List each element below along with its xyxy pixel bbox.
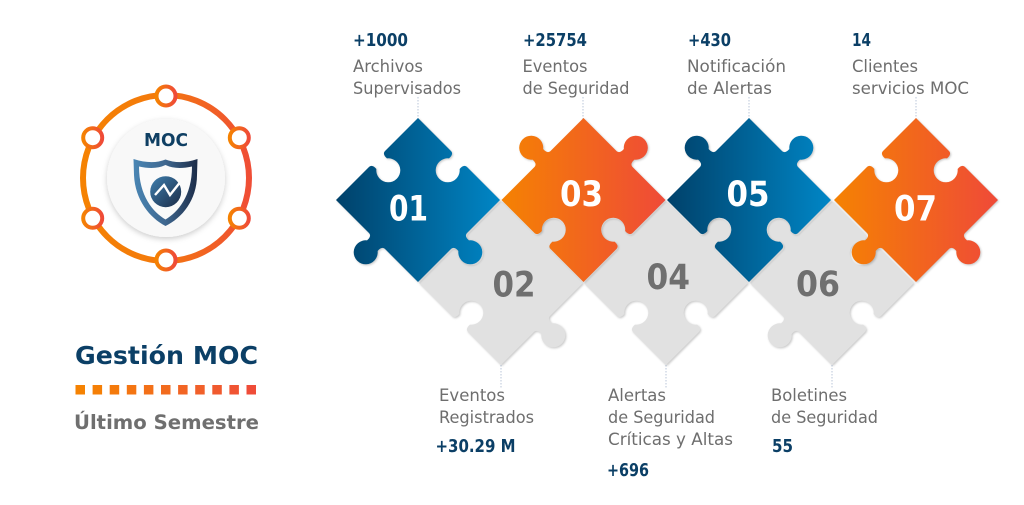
dotted orange divider: [76, 385, 256, 394]
puzzle piece 01: [336, 118, 500, 282]
text block: Eventos Registrados: [436, 386, 534, 457]
heading: Gestión MOC: Gestión MOC: [75, 341, 258, 370]
text block: Alertas de Seguridad Críticas y Altas: Críticas y Altas: [608, 430, 733, 449]
text block: Archivos Supervisados: Supervisados: [353, 79, 461, 98]
puzzle numbers: 02: [492, 266, 536, 306]
puzzle numbers: 07: [894, 190, 937, 230]
puzzle piece 06: [750, 201, 914, 365]
text block: Archivos Supervisados: Archivos: [353, 57, 423, 76]
text block: Alertas de Seguridad Críticas y Altas: de Seguridad: [608, 408, 715, 427]
text block: Clientes servicios MOC: servicios MOC: [852, 79, 969, 98]
text block: Alertas de Seguridad Críticas y Altas: [607, 386, 733, 481]
puzzle numbers: 06: [796, 265, 840, 305]
emblem label: MOC: [144, 130, 188, 151]
puzzle numbers: [389, 175, 937, 306]
puzzle piece 05: [667, 118, 831, 282]
text block: Boletines de Seguridad: 55: [772, 437, 793, 457]
text block: Clientes servicios MOC: Clientes: [852, 57, 918, 76]
text block: Eventos Registrados: +30.29 M: [436, 437, 516, 457]
puzzle numbers: 01: [389, 190, 428, 230]
text block: Notificación de Alertas: Notificación: [687, 57, 786, 76]
inner disc: [107, 119, 225, 237]
puzzle piece 02: [419, 201, 583, 365]
puzzle numbers: 04: [646, 258, 690, 298]
text block: Eventos de Seguridad: [522, 31, 630, 98]
panel: MOC emblem: [83, 86, 249, 270]
text block: Clientes servicios MOC: 14: [852, 31, 871, 51]
orange ring: [83, 95, 249, 261]
text block: Boletines de Seguridad: de Seguridad: [771, 408, 878, 427]
puzzle numbers: 05: [726, 175, 770, 215]
puzzle piece 03: [502, 118, 666, 282]
text block: Archivos Supervisados: [353, 31, 461, 98]
text block: Clientes servicios MOC: [852, 31, 969, 98]
puzzle piece 04: [584, 201, 748, 365]
puzzle numbers: 03: [560, 175, 603, 215]
text block: Alertas de Seguridad Críticas y Altas: Alertas: [608, 386, 666, 405]
leader lines: [418, 97, 916, 388]
text block: Eventos de Seguridad: Eventos: [522, 57, 588, 76]
subheading: Último Semestre: Último Semestre: [74, 410, 259, 434]
ring nodes: [83, 86, 249, 270]
puzzle piece 07: [834, 118, 998, 282]
text block: Notificación de Alertas: [687, 31, 786, 98]
text block: Boletines de Seguridad: [771, 386, 878, 457]
text block: Notificación de Alertas: +430: [688, 31, 731, 51]
text block: Notificación de Alertas: de Alertas: [687, 79, 772, 98]
text block: Eventos de Seguridad: de Seguridad: [522, 79, 630, 98]
text block: Alertas de Seguridad Críticas y Altas: +696: [607, 461, 649, 481]
icon: shield: [134, 159, 198, 226]
text block: Eventos Registrados: Eventos: [439, 386, 505, 405]
text block: Boletines de Seguridad: Boletines: [771, 386, 847, 405]
text block: Eventos de Seguridad: +25754: [523, 31, 587, 51]
text block: Eventos Registrados: Registrados: [439, 408, 534, 427]
text block: Archivos Supervisados: +1000: [353, 31, 408, 51]
